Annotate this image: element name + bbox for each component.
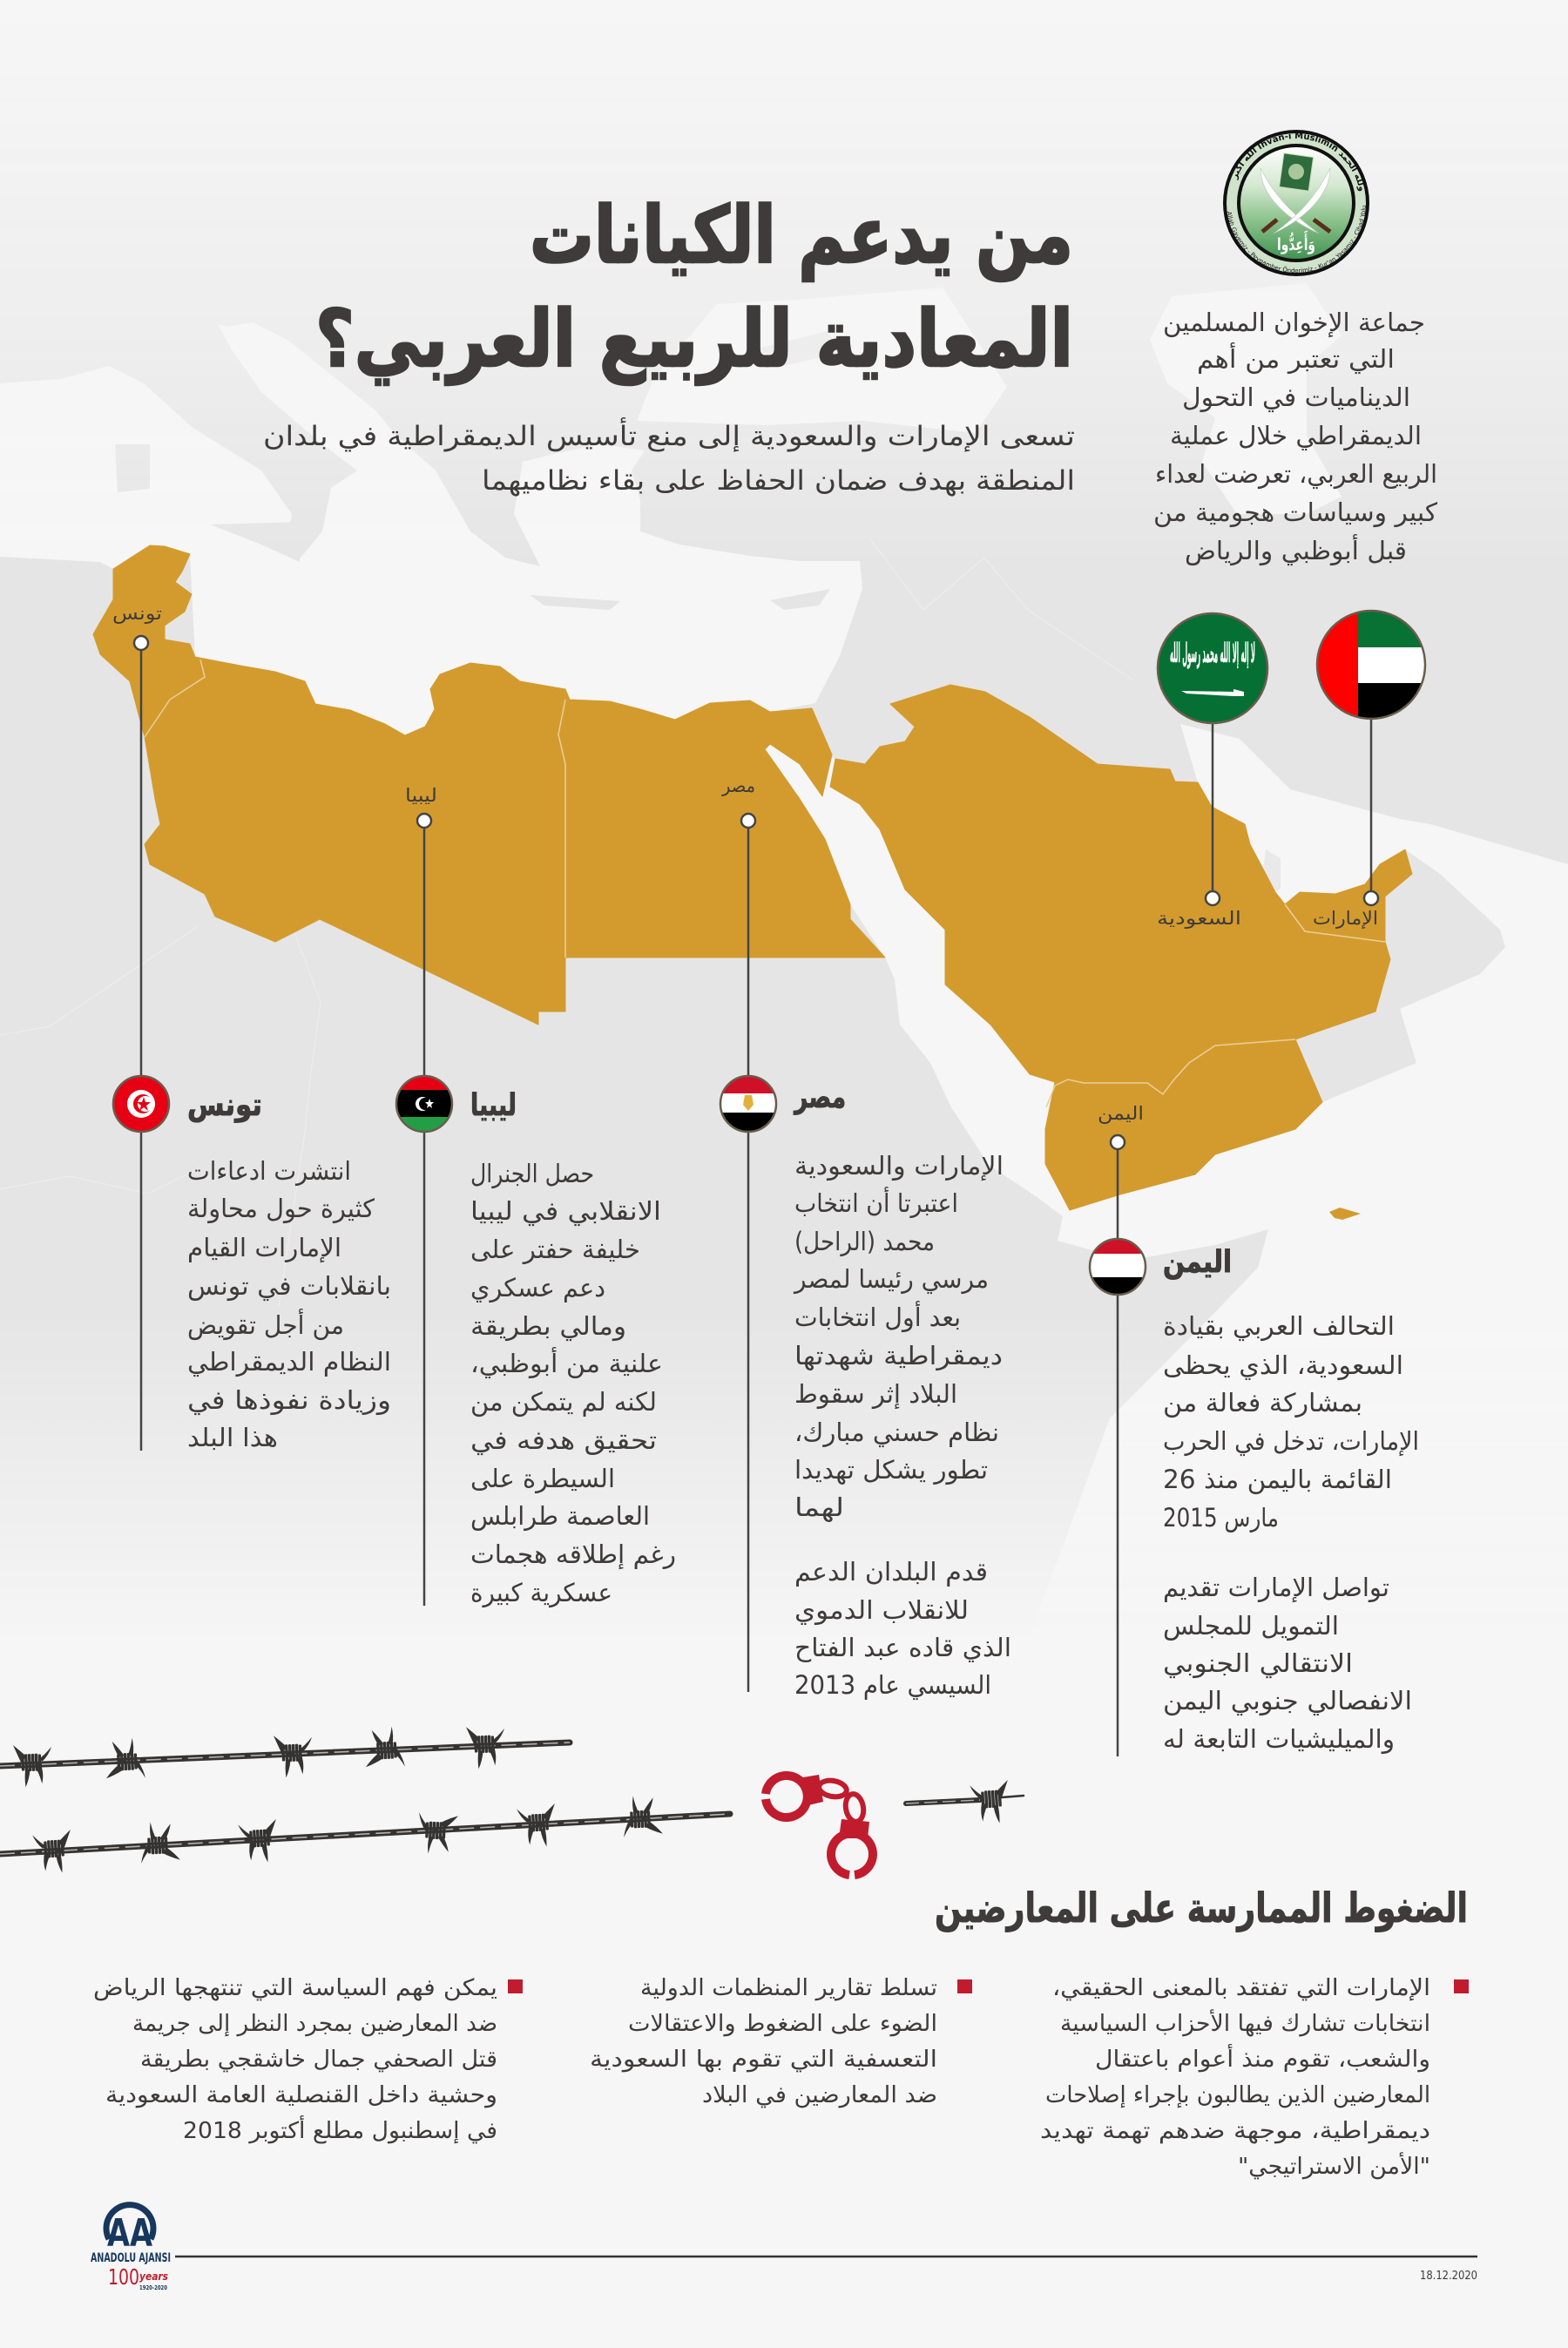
icon: flag of UAE [1317, 611, 1425, 719]
text block: Tunisia: من أجل تقويض [187, 1308, 344, 1340]
title: المعادية للربيع العربي؟ [315, 294, 1073, 385]
text block: Muslim Brotherhood: التي تعتبر من أهم [1197, 342, 1395, 375]
map labels [112, 603, 1378, 1124]
text block: UAE pressures: "الأمن الاستراتيجي" [1238, 2151, 1430, 2180]
text block: UAE pressures: ديمقراطية، موجهة ضدهم تهمة تهديد [1040, 2118, 1430, 2144]
text block: Yemen: مارس 2015 [1163, 1503, 1279, 1533]
text block: Saudi policy: قتل الصحفي جمال خاشقجي بطريقة [140, 2047, 497, 2073]
heading: Yemen: اليمن [1163, 1245, 1232, 1280]
icon: Muslim Brotherhood emblem [1223, 130, 1369, 276]
panel: Yemen [1090, 1239, 1419, 1754]
logo: Anadolu Agency [91, 2205, 171, 2291]
logo: Anadolu Agency: 100 [108, 2264, 139, 2290]
logo: Anadolu Agency: years [139, 2270, 168, 2283]
map: highlighted countries [93, 545, 1412, 1220]
icon: flag of Libya [396, 1076, 452, 1132]
text block: Egypt: الإمارات والسعودية [794, 1151, 1004, 1181]
text block: Egypt: الذي قاده عبد الفتاح [794, 1633, 1011, 1662]
text block: Saudi policy: وحشية داخل القنصلية العامة السعودية [105, 2082, 497, 2108]
map labels: اليمن [1098, 1103, 1144, 1124]
text block: Yemen: القائمة باليمن منذ 26 [1163, 1465, 1392, 1494]
date: 18.12.2020 [1420, 2270, 1477, 2283]
logo: Anadolu Agency: AA [107, 2211, 152, 2256]
text block: Tunisia: كثيرة حول محاولة [187, 1194, 375, 1223]
text block: Yemen: التحالف العربي بقيادة [1163, 1311, 1395, 1342]
map labels: مصر [721, 775, 755, 796]
text block: UAE pressures [1040, 1975, 1469, 2180]
text block: Libya: علنية من أبوظبي، [470, 1346, 663, 1379]
text block: Tunisia: انتشرت ادعاءات [187, 1156, 351, 1186]
subtitle: تسعى الإمارات والسعودية إلى منع تأسيس الديمقراطية في بلدان [263, 417, 1075, 452]
text: لا إله إلا الله محمد رسول الله [1170, 638, 1255, 669]
heading: Egypt: مصر [793, 1080, 846, 1115]
background map of the region [0, 340, 1568, 1485]
text block: Egypt: لهما [794, 1492, 844, 1522]
icon: flag of Tunisia [113, 1076, 169, 1132]
map pins [134, 636, 1378, 1149]
text block: Egypt: السيسي عام 2013 [794, 1670, 991, 1701]
connector lines [141, 643, 1371, 1756]
text block: Yemen: تواصل الإمارات تقديم [1163, 1573, 1389, 1603]
text block: Saudi policy [93, 1975, 523, 2144]
text block: Yemen: بمشاركة فعالة من [1163, 1388, 1362, 1418]
logo: Anadolu Agency: ANADOLU AJANSI [91, 2251, 171, 2265]
text block: Egypt: تطور يشكل تهديدا [794, 1455, 988, 1485]
icon: flag of Saudi Arabia [1158, 613, 1267, 723]
text block: UAE pressures: المعارضين الذين يطالبون بإجراء إصلاحات [1045, 2082, 1430, 2108]
bullet [508, 1979, 523, 1993]
text block: Libya: تحقيق هدفه في [470, 1425, 657, 1456]
map labels: الإمارات [1313, 908, 1378, 929]
text block: Egypt: للانقلاب الدموي [794, 1595, 969, 1625]
text block: Muslim Brotherhood: الديناميات في التحول [1182, 382, 1410, 413]
map: Tunisia, Libya, Egypt [93, 545, 885, 1025]
text block: international reports: الضوء على الضغوط والاعتقالات [628, 2011, 937, 2037]
text block: UAE pressures: والشعب، تقوم منذ أعوام باعتقال [1095, 2043, 1430, 2073]
map: country borders [145, 660, 1385, 1107]
icon: handcuffs [766, 1775, 873, 1875]
text block: Tunisia: بانقلابات في تونس [187, 1271, 391, 1302]
icon: Muslim Brotherhood emblem: الله أكبر İhvan-ı Müslimin ولله الحمد [1235, 133, 1363, 192]
text block: Muslim Brotherhood: الربيع العربي، تعرضت لعداء [1155, 459, 1437, 490]
icon: Muslim Brotherhood emblem: Allah Gayemiz - Peygamber Önderimiz - Kur'an Yasamız - Cihad Yolumuz [1227, 206, 1366, 273]
icon: barbed wire fragment [906, 1780, 1024, 1824]
icon: barbed wire top [0, 1725, 570, 1788]
map labels: تونس [112, 603, 162, 624]
bullet [1454, 1979, 1469, 1993]
text block: UAE pressures: انتخابات تشارك فيها الأحزاب السياسية [1060, 2008, 1430, 2037]
text block: Libya: عسكرية كبيرة [470, 1578, 612, 1607]
text block: international reports: ضد المعارضين في البلاد [702, 2082, 937, 2108]
subtitle: المنطقة بهدف ضمان الحفاظ على بقاء نظاميهما [482, 465, 1075, 497]
text block: international reports: التعسفية التي تقوم بها السعودية [590, 2047, 937, 2073]
footer rule [175, 2256, 1477, 2257]
map labels: السعودية [1157, 908, 1241, 929]
icon: barbed wire bottom [0, 1795, 730, 1874]
text block: UAE pressures: الإمارات التي تفتقد بالمعنى الحقيقي، [1052, 1975, 1430, 2001]
map: Saudi Arabia, UAE, Yemen [830, 685, 1412, 1210]
text block: Muslim Brotherhood: جماعة الإخوان المسلمين [1163, 308, 1425, 338]
text block: Yemen: التمويل للمجلس [1163, 1611, 1339, 1641]
text block: Libya [470, 1159, 676, 1607]
text block: Saudi policy: ضد المعارضين بمجرد النظر إلى جريمة [132, 2011, 497, 2037]
panel: Libya [396, 1076, 676, 1607]
text block: Muslim Brotherhood: قبل أبوظبي والرياض [1185, 533, 1407, 566]
text block: Libya: ومالي بطريقة [470, 1311, 626, 1342]
map: Socotra island [1329, 1208, 1361, 1220]
text block: international reports [590, 1975, 972, 2108]
text block: Egypt: بعد أول انتخابات [794, 1300, 961, 1332]
panel: Egypt [720, 1076, 1011, 1701]
title [315, 190, 1073, 385]
icon: flag of Yemen [1090, 1239, 1146, 1295]
subtitle [263, 417, 1075, 497]
text block: Saudi policy: يمكن فهم السياسة التي تنتهجها الرياض [93, 1975, 497, 2001]
logo: Anadolu Agency: 1920-2020 [139, 2284, 167, 2291]
bullet [957, 1979, 972, 1993]
text block: Yemen: الانتقالي الجنوبي [1163, 1648, 1353, 1679]
title: من يدعم الكيانات [530, 190, 1073, 281]
text block: Egypt [793, 1151, 1011, 1701]
text block: Tunisia: الإمارات القيام [187, 1233, 341, 1263]
text block: Egypt: البلاد إثر سقوط [794, 1379, 957, 1410]
text block: Libya: خليفة حفتر على [470, 1235, 640, 1264]
text block: Muslim Brotherhood: الديمقراطي خلال عملية [1170, 421, 1422, 451]
text block: Yemen: السعودية، الذي يحظى [1163, 1350, 1403, 1380]
icon: Muslim Brotherhood emblem: وَأَعِدُّوا [1277, 231, 1315, 254]
text block: Libya: رغم إطلاقه هجمات [470, 1539, 676, 1570]
text block: Libya: السيطرة على [470, 1464, 615, 1493]
text block: Tunisia: النظام الديمقراطي [187, 1347, 391, 1377]
text block: Libya: حصل الجنرال [470, 1159, 594, 1188]
text block: Egypt: محمد (الراحل) [794, 1227, 935, 1256]
text block: Yemen: الانفصالي جنوبي اليمن [1163, 1686, 1412, 1716]
text block: Egypt: نظام حسني مبارك، [794, 1418, 999, 1448]
map labels: ليبيا [405, 785, 437, 806]
text block: Libya: دعم عسكري [470, 1273, 605, 1303]
text block: Libya: الانقلابي في ليبيا [470, 1196, 661, 1227]
heading: Tunisia: تونس [187, 1088, 262, 1123]
text block: Muslim Brotherhood: كبير وسياسات هجومية من [1153, 497, 1437, 527]
text block: Saudi policy: في إسطنبول مطلع أكتوبر 2018 [183, 2115, 497, 2144]
text block: Egypt: اعتبرتا أن انتخاب [794, 1186, 958, 1218]
text block: Tunisia: وزيادة نفوذها في [187, 1385, 391, 1416]
text block: Libya: لكنه لم يتمكن من [470, 1387, 657, 1418]
text block: Tunisia: هذا البلد [187, 1423, 278, 1452]
text block: Egypt: قدم البلدان الدعم [794, 1557, 988, 1587]
text block: Yemen [1163, 1311, 1419, 1754]
text block: Yemen: الإمارات، تدخل في الحرب [1163, 1426, 1419, 1457]
heading: Libya: ليبيا [470, 1088, 517, 1123]
text block: international reports: تسلط تقارير المنظمات الدولية [640, 1975, 937, 2001]
text block: Muslim Brotherhood [1153, 308, 1437, 566]
icon: flag of Egypt [720, 1076, 776, 1132]
text block: Tunisia [187, 1156, 391, 1452]
text block: Egypt: ديمقراطية شهدتها [794, 1341, 1003, 1370]
text block: Egypt: مرسي رئيسا لمصر [793, 1264, 989, 1295]
text block: Libya: العاصمة طرابلس [470, 1501, 650, 1531]
text block: Yemen: والميليشيات التابعة له [1163, 1724, 1395, 1754]
panel: Tunisia [113, 1076, 391, 1452]
